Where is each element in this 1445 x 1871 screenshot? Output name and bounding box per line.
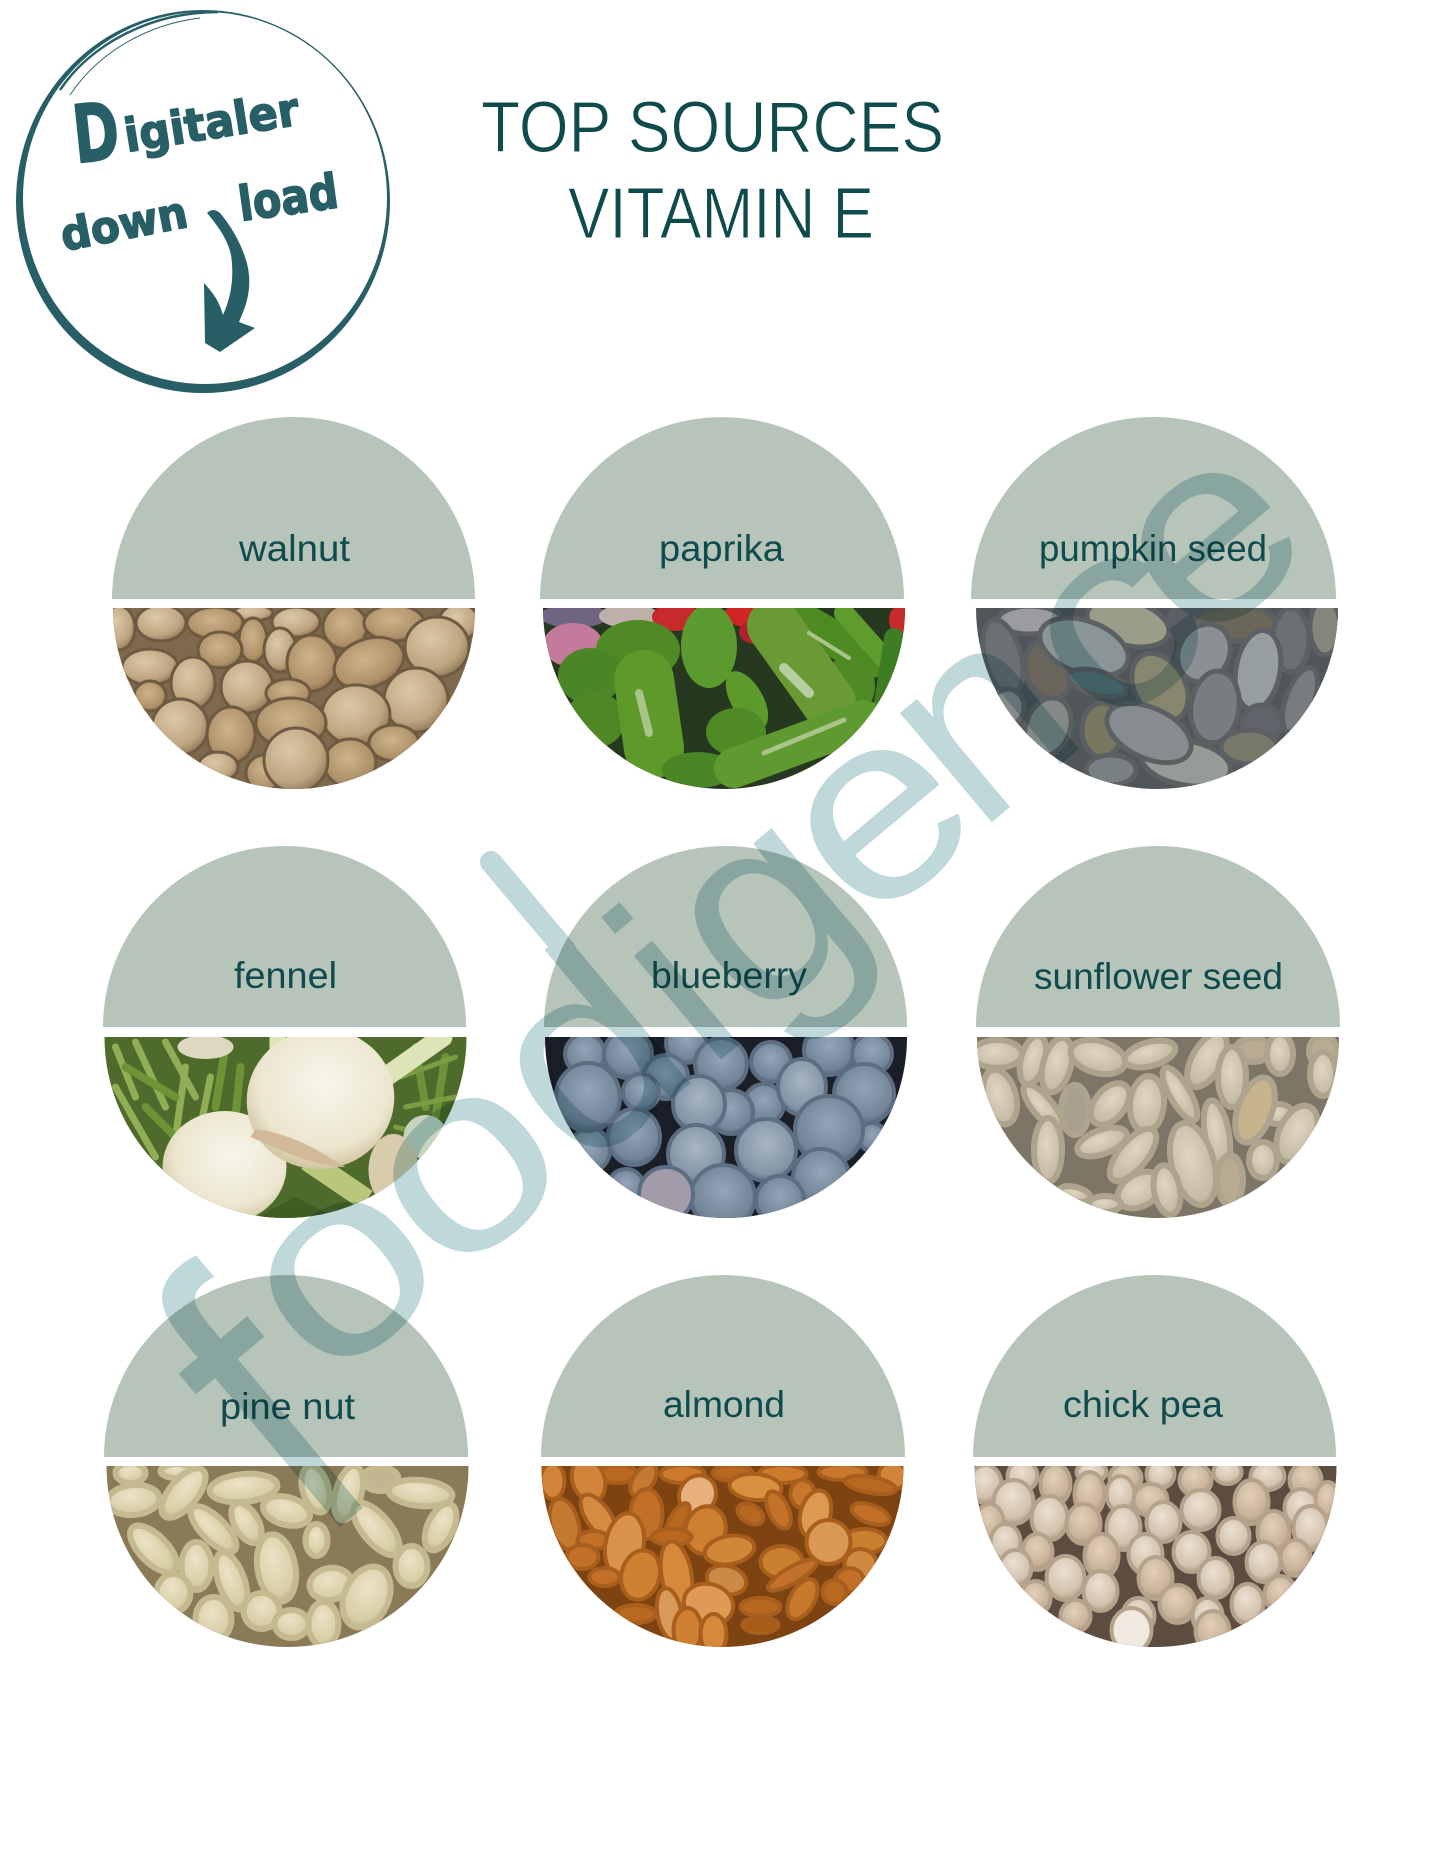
watermark c: c [952,456,1260,782]
label background [103,846,466,1027]
label text: sunflower seed [1034,956,1283,997]
handwritten down: down [56,187,192,262]
label background [540,417,904,599]
handwritten D: D [68,85,124,182]
watermark g: g [599,738,915,1072]
panel: paprika [540,417,909,789]
label background [976,846,1340,1027]
label text: pumpkin seed [1039,528,1267,569]
label text: paprika [659,528,784,569]
photo: fennel bulbs [104,1037,466,1218]
label background [973,1275,1336,1457]
watermark f: f [74,1195,447,1614]
photo: pumpkin seeds [976,608,1338,789]
watermark d: d [424,884,742,1219]
photo: peppers [540,602,909,789]
label text: blueberry [651,955,807,996]
watermark n: n [821,552,1130,879]
title line 1: TOP SOURCES [481,88,944,168]
photo: sunflower seeds [972,1027,1339,1218]
watermark i: i [558,855,788,1113]
handwritten igitaler: igitaler [120,82,303,163]
arrow [204,210,255,352]
watermark o: o [172,1094,494,1431]
label text: pine nut [220,1386,356,1427]
panel: pine nut [104,1275,468,1647]
handwritten load: load [235,164,342,233]
photo: almonds [542,1466,904,1647]
label text: walnut [238,528,351,569]
photo: blueberries [545,1037,907,1218]
title [481,88,944,254]
panel: blueberry [544,846,907,1229]
label background [541,1275,905,1457]
photo: chick peas [970,1460,1340,1652]
label background [104,1275,468,1457]
label text: chick pea [1063,1384,1223,1425]
photo: pine nuts [106,1461,468,1647]
brush circle [16,10,390,393]
label background [544,846,907,1027]
panel: pumpkin seed [971,417,1340,792]
label background [971,417,1336,599]
panel: chick pea [970,1275,1340,1652]
panel: sunflower seed [972,846,1340,1218]
label text: almond [663,1384,785,1425]
badge: digital download [16,10,390,393]
photo: walnuts [103,604,479,792]
watermark e: e [1045,366,1359,697]
label text: fennel [234,955,337,996]
watermark: foodigence [74,366,1359,1614]
watermark o: o [295,990,617,1327]
panel: almond [540,1275,906,1654]
panel: fennel [103,846,466,1223]
panel: walnut [103,417,479,792]
title line 2: VITAMIN E [568,174,874,254]
label background [112,417,475,599]
watermark e: e [714,643,1028,974]
watermark d ascender [491,862,565,950]
